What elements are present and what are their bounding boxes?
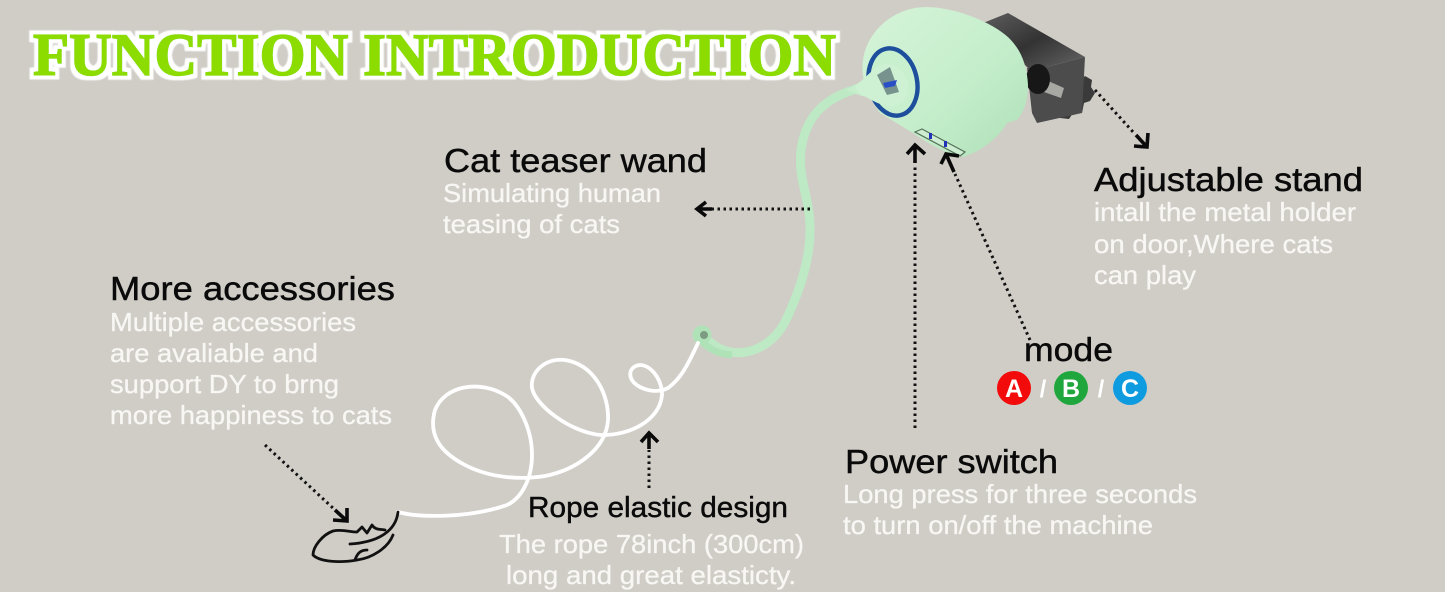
switch slot [915,129,965,156]
text: adjustable stand: can play [1094,260,1196,290]
nozzle window [877,67,899,95]
text: more accessories: more happiness to cats [110,400,392,430]
text: power switch: Power switch [845,443,1058,480]
text: power switch: Long press for three seconds [843,479,1197,509]
mode badges [997,371,1147,405]
title: FUNCTION INTRODUCTION [33,22,836,88]
text: cat teaser wand: Simulating human [443,178,661,208]
text: adjustable stand: on door,Where cats [1094,229,1333,259]
text: adjustable stand: Adjustable stand [1094,161,1363,198]
text: more accessories: are avaliable and [110,338,318,368]
mode badges: B [1062,375,1080,403]
arrow: cat teaser wand [697,202,810,216]
text: mode: mode [1024,331,1113,368]
connector loop [692,326,732,355]
white elastic rope [398,343,698,516]
text: adjustable stand [1094,161,1363,290]
arrow: rope elastic [641,433,658,488]
blue ring [862,44,924,120]
text: power switch: to turn on/off the machine [843,510,1153,540]
mode badges: / [1040,376,1047,403]
device: cat teaser toy [710,7,1095,353]
text: rope elastic design [499,492,804,590]
text: power switch [843,443,1197,540]
arrow: adjustable stand [1095,90,1148,147]
nozzle cone [855,64,908,106]
green cable [710,72,885,353]
text: more accessories: Multiple accessories [110,307,356,337]
mode badges: C [1121,375,1139,403]
text: rope elastic design: long and great elasticty. [506,560,796,590]
text: rope elastic design: The rope 78inch (300cm) [499,529,804,559]
arrow: mode [941,154,1030,340]
metal stand [983,13,1095,123]
text: cat teaser wand [443,142,707,239]
arrow: power switch [907,145,925,428]
mode badges: A [1005,375,1023,403]
text: cat teaser wand: Cat teaser wand [444,142,707,179]
text: cat teaser wand: teasing of cats [443,209,620,239]
arrow: more accessories [265,445,347,521]
text: rope elastic design: Rope elastic design [528,492,788,524]
text: adjustable stand: intall the metal holder [1094,197,1356,227]
text: more accessories: More accessories [110,270,395,307]
mode badges: / [1098,376,1105,403]
body shell [862,7,1028,157]
text: more accessories [110,270,395,430]
icon: feather mouse [313,512,398,562]
text: more accessories: support DY to brng [110,369,339,399]
